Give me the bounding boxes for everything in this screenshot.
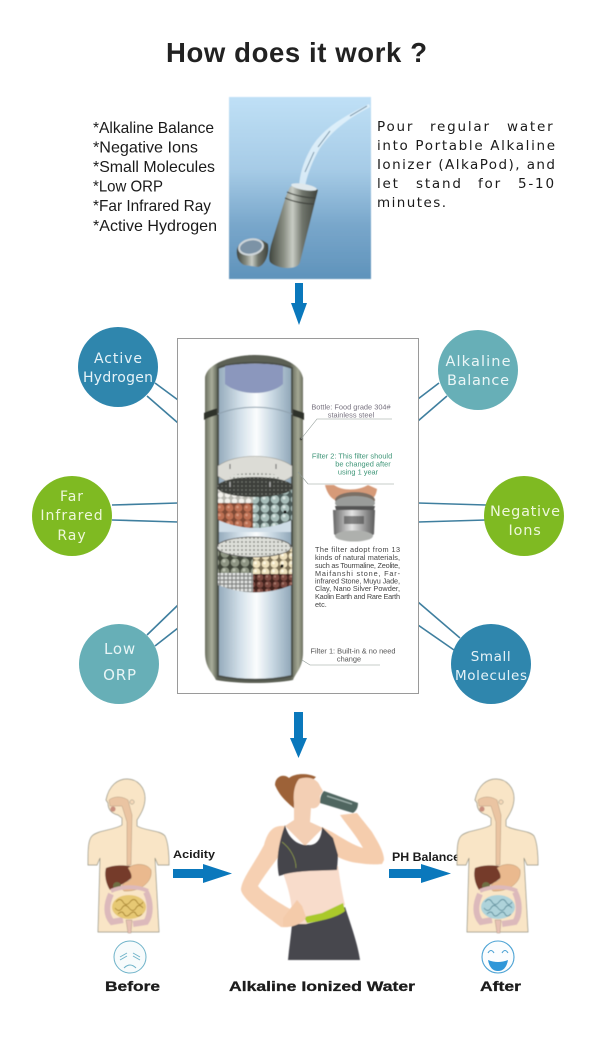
bottle <box>320 791 358 813</box>
replaceable filter image <box>325 485 377 542</box>
small intestine: yellow <box>112 895 146 919</box>
caption: Alkaline Ionized Water: Alkaline Ionized Water <box>229 979 416 994</box>
filter description <box>315 545 401 609</box>
description text: stand <box>416 176 463 192</box>
circle: Small Molecules <box>451 624 531 704</box>
filter description: Kaolin Earth and Rare Earth <box>315 592 400 601</box>
right arm <box>322 813 384 864</box>
arrow: filter to result <box>290 712 307 758</box>
description text: minutes. <box>377 195 447 211</box>
arrow: acidity: Acidity <box>173 849 216 861</box>
description text: let <box>377 176 400 192</box>
torso <box>283 866 345 924</box>
caption: Before: Before <box>105 979 161 994</box>
waistband <box>304 903 345 923</box>
circle: Active Hydrogen: Active <box>94 351 142 367</box>
hand on hip <box>283 900 306 927</box>
circle: Active Hydrogen <box>78 327 158 407</box>
label: filter 2: using 1 year <box>338 468 379 476</box>
filter description: infrared Stone, Muyu Jade, <box>315 576 400 586</box>
circle: Alkaline Balance: Alkaline <box>446 354 511 370</box>
description text: Pour <box>377 119 414 135</box>
circle: Far Infrared Ray: Ray <box>57 528 87 544</box>
icon: happy face <box>482 941 514 973</box>
left arm <box>241 826 307 927</box>
filter description: such as Tourmaline, Zeolite, <box>315 561 400 570</box>
circle: Low ORP: ORP <box>103 666 137 684</box>
icon: sad face <box>114 941 146 973</box>
circle: Low ORP: Low <box>104 640 136 658</box>
circle: Negative Ions <box>484 476 564 556</box>
panel: filter cross-section <box>178 338 418 694</box>
leader lines <box>298 419 394 665</box>
circle: Low ORP <box>79 624 159 704</box>
filter description: Maifanshi stone, Far- <box>315 569 401 578</box>
filter description: The filter adopt from 13 <box>315 545 400 554</box>
hair <box>275 774 316 810</box>
water stream <box>299 104 370 186</box>
circle: Alkaline Balance <box>438 330 518 410</box>
benefits list: *Negative Ions <box>93 140 198 156</box>
benefits list: *Active Hydrogen <box>93 218 217 235</box>
filter description: kinds of natural materials, <box>315 553 400 562</box>
body: before <box>88 779 169 933</box>
arrow: acidity <box>173 849 232 883</box>
benefits list: *Far Infrared Ray <box>93 198 211 215</box>
benefits list: *Alkaline Balance <box>93 120 214 137</box>
label: bottle material: stainless steel <box>328 410 375 420</box>
description text: Ionizer (AlkaPod), and <box>377 157 556 173</box>
circle: Small Molecules: Molecules <box>455 668 527 684</box>
label: filter 1: Filter 1: Built-in & no need <box>310 646 396 656</box>
description text: water <box>507 119 554 135</box>
label: filter 2: be changed after <box>335 460 391 468</box>
description text: into Portable Alkaline <box>377 138 556 154</box>
circle: Alkaline Balance: Balance <box>447 373 509 389</box>
description text: for <box>478 176 502 192</box>
benefits list: *Low ORP <box>93 178 163 196</box>
head and neck <box>285 778 323 846</box>
filter description: Clay, Nano Silver Powder, <box>315 584 400 593</box>
caption: After: After <box>480 979 522 994</box>
label: filter 2: Filter 2: This filter should <box>312 452 392 460</box>
leggings <box>288 907 360 960</box>
circle: Far Infrared Ray: Far <box>60 489 84 505</box>
bottle <box>269 185 318 268</box>
photo: pouring water into bottle <box>229 97 371 279</box>
bottle cutaway illustration <box>204 355 304 683</box>
sports top <box>278 825 338 876</box>
arrow: photo to filter <box>291 283 307 325</box>
benefits list: *Small Molecules <box>93 159 215 176</box>
woman drinking alkaline water <box>241 774 384 960</box>
description text <box>377 119 556 211</box>
description text: regular <box>430 119 491 135</box>
arrow: PH balance: PH Balance <box>392 852 460 864</box>
connector lines <box>112 383 486 650</box>
bottle cap <box>237 239 268 267</box>
circle: Negative Ions: Ions <box>508 523 542 539</box>
description text: 5-10 <box>518 176 556 192</box>
label: filter 1: change <box>337 654 361 664</box>
circle: Far Infrared Ray: Infrared <box>40 508 104 524</box>
circle: Active Hydrogen: Hydrogen <box>83 370 153 386</box>
circle: Negative Ions: Negative <box>490 504 560 520</box>
body: after <box>457 779 538 933</box>
arrow: PH balance <box>389 852 460 883</box>
title: How does it work ? <box>166 37 427 68</box>
filter description: etc. <box>315 600 327 609</box>
benefits list <box>93 120 217 235</box>
circle: Far Infrared Ray <box>32 476 112 556</box>
small intestine: blue <box>481 895 515 919</box>
circle: Small Molecules: Small <box>471 649 511 665</box>
label: bottle material: Bottle: Food grade 304# <box>311 402 392 412</box>
